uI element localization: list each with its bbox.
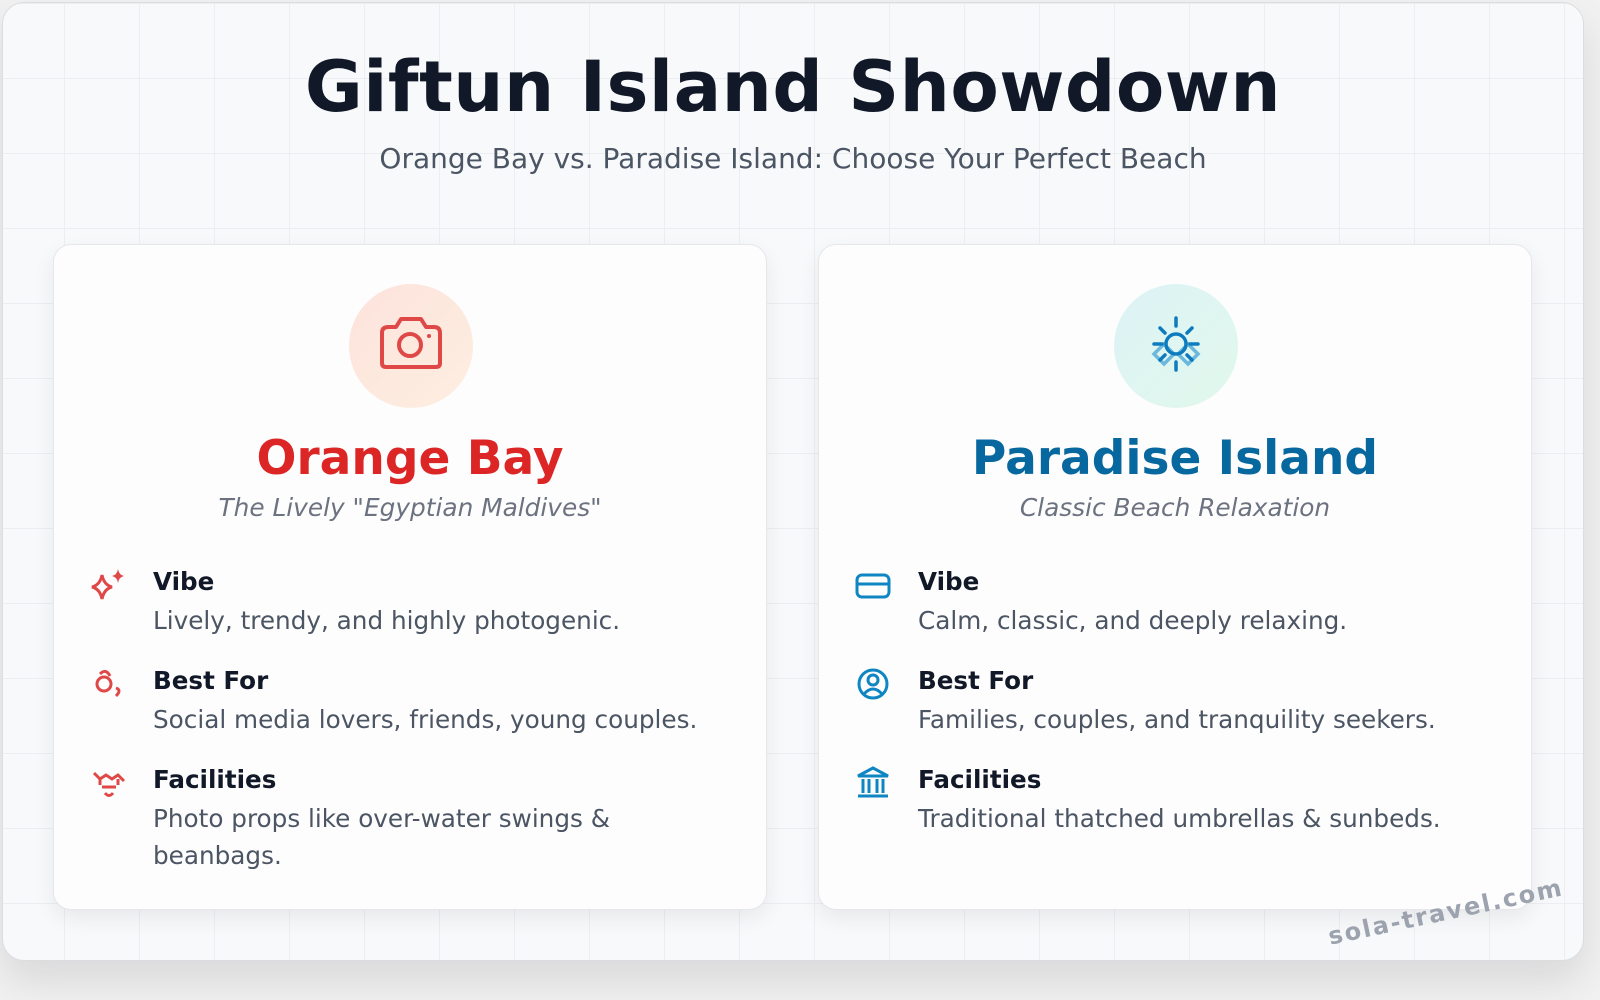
item: best for xyxy=(96,666,697,734)
tagline: The Lively "Egyptian Maldives" xyxy=(218,493,602,522)
panel: Orange Bay xyxy=(53,244,767,910)
item: best for xyxy=(858,666,1436,734)
icon: sunbed xyxy=(856,574,890,598)
item: facilities xyxy=(93,765,610,870)
icon: user xyxy=(858,668,888,700)
icon: camera xyxy=(349,284,473,408)
panel: Orange Bay: Best For xyxy=(153,666,268,695)
panel: Paradise Island: Vibe xyxy=(918,567,979,596)
heading: Orange Bay xyxy=(257,431,563,486)
panel: Paradise Island: Best For xyxy=(918,666,1033,695)
panel: Orange Bay: Lively, trendy, and highly photogenic. xyxy=(153,606,620,635)
item: vibe xyxy=(856,567,1347,635)
watermark: sola-travel.com xyxy=(1326,873,1566,951)
icon: sun and umbrellas xyxy=(1114,284,1238,408)
panel: Paradise Island: Traditional thatched umbrellas & sunbeds. xyxy=(918,804,1441,833)
icon: building xyxy=(857,766,889,798)
panel: Orange Bay: Facilities xyxy=(153,765,276,794)
subtitle: Orange Bay vs. Paradise Island: Choose Your Perfect Beach xyxy=(379,142,1207,175)
panel: Orange Bay: Social media lovers, friends, young couples. xyxy=(153,705,697,734)
panel: Paradise Island: Calm, classic, and deeply relaxing. xyxy=(918,606,1347,635)
panel: Paradise Island: Facilities xyxy=(918,765,1041,794)
heading: Paradise Island xyxy=(972,431,1378,486)
panel: Orange Bay: Photo props like over-water swings & beanbags. xyxy=(153,804,610,870)
icon: sparkles xyxy=(92,569,124,600)
panel: Orange Bay: Vibe xyxy=(153,567,214,596)
icon: swing xyxy=(93,772,125,797)
panel: Paradise Island xyxy=(818,244,1532,910)
title: Giftun Island Showdown xyxy=(305,46,1281,128)
tagline: Classic Beach Relaxation xyxy=(1020,493,1330,522)
icon: people xyxy=(96,670,120,697)
item: vibe xyxy=(92,567,620,635)
item: facilities xyxy=(857,765,1441,833)
panel: Paradise Island: Families, couples, and tranquility seekers. xyxy=(918,705,1436,734)
